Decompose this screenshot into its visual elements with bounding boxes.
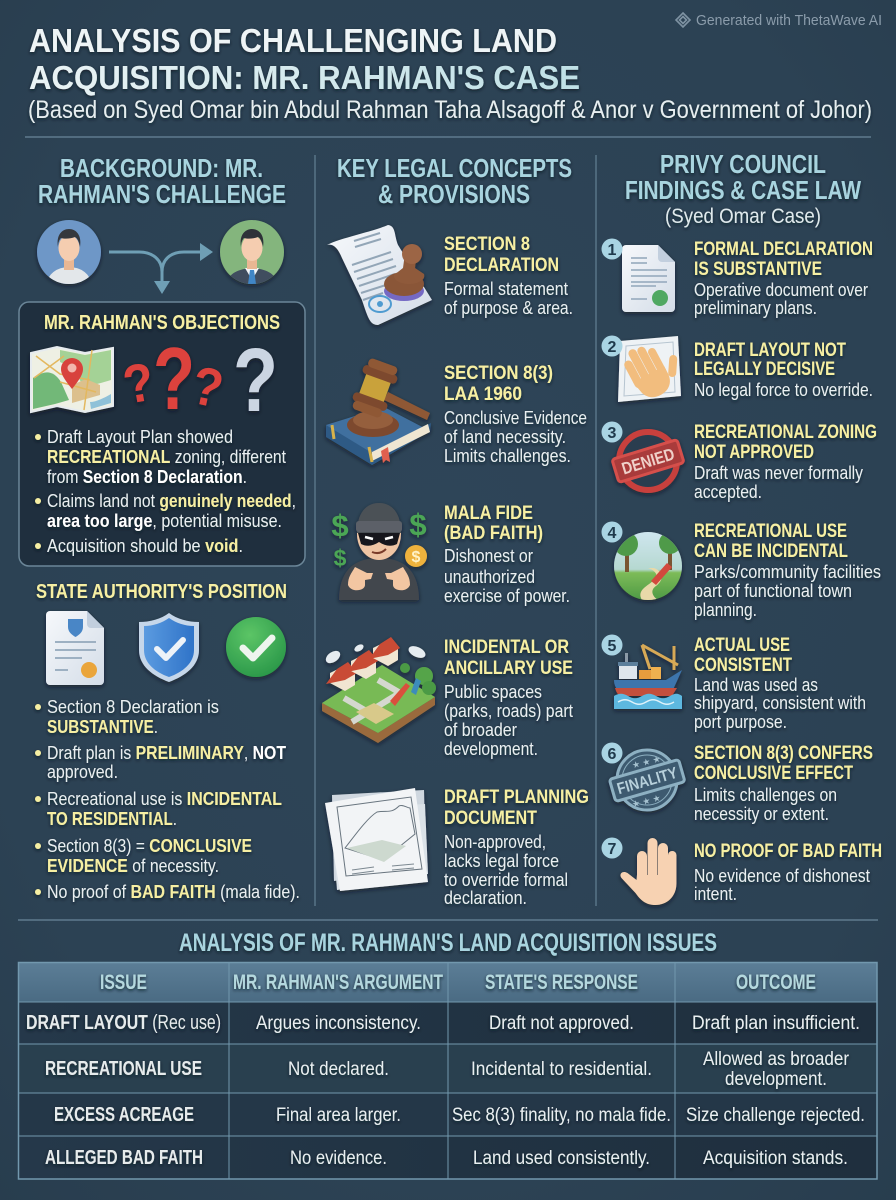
finding 4: [602, 521, 881, 620]
objections list: RECREATIONAL zoning, different: [47, 447, 286, 467]
icon: scroll and stamp: [327, 225, 432, 325]
icon: red question marks: ?: [187, 355, 228, 420]
table row: excess acreage: Size challenge rejected.: [686, 1105, 865, 1126]
table heading: ANALYSIS OF MR. RAHMAN'S LAND ACQUISITION ISSUES: [179, 929, 717, 957]
arrow: branching path: [109, 243, 213, 294]
table row: recreational use: Not declared.: [288, 1059, 389, 1080]
number badge 7: 7: [608, 841, 617, 858]
column 3 heading: [625, 149, 861, 228]
icon: masked thief with money: $: [412, 549, 421, 566]
table row: excess acreage: Final area larger.: [276, 1105, 401, 1126]
finding text: [694, 521, 881, 620]
watermark: Generated with ThetaWave AI: [696, 12, 882, 29]
concept text: Non-approved,: [444, 832, 546, 852]
table: land acquisition issues: [18, 962, 877, 1179]
icon: certified document: [46, 611, 104, 685]
icon: red question marks: ?: [119, 352, 159, 416]
finding text: [694, 239, 873, 318]
finding text: [694, 635, 866, 732]
table row: recreational use: Allowed as broader: [703, 1049, 850, 1070]
finding text: LEGALLY DECISIVE: [694, 359, 835, 380]
concept: Section 8 Declaration: [327, 225, 573, 325]
table row: excess acreage: EXCESS ACREAGE: [54, 1104, 194, 1126]
number badge 5: [602, 634, 622, 656]
table row: recreational use: Incidental to residential.: [471, 1059, 652, 1080]
concept text: lacks legal force: [444, 851, 559, 871]
finding text: CONCLUSIVE EFFECT: [694, 763, 853, 784]
column 3 heading: (Syed Omar Case): [665, 205, 821, 228]
concept: Draft Planning Document: [325, 787, 589, 908]
concept text: exercise of power.: [444, 586, 570, 606]
finding 3: [602, 422, 877, 502]
finding text: CAN BE INCIDENTAL: [694, 541, 848, 562]
finding 7: [602, 838, 882, 905]
finding text: intent.: [694, 884, 737, 904]
concept text: of broader: [444, 720, 517, 740]
icon: raised hand: [620, 838, 676, 905]
concept text: (BAD FAITH): [444, 523, 543, 544]
concept text: [444, 503, 570, 606]
concept text: [444, 787, 589, 908]
icon: hand on draft layout: [618, 332, 690, 404]
state position list: SUBSTANTIVE.: [47, 717, 158, 737]
section heading: STATE AUTHORITY'S POSITION: [36, 581, 287, 603]
number badge 4: [602, 522, 622, 542]
table row: alleged bad faith: Acquisition stands.: [703, 1148, 848, 1169]
title: [29, 22, 580, 96]
table row: alleged bad faith: [45, 1147, 848, 1169]
icon: state officer avatar: [220, 220, 284, 286]
concept text: INCIDENTAL OR: [444, 637, 569, 658]
concept text: Conclusive Evidence: [444, 408, 587, 428]
state position list: Recreational use is INCIDENTAL: [47, 789, 282, 809]
icon: denied stamp: DENIED: [620, 444, 677, 478]
column 3 heading: PRIVY COUNCIL: [660, 149, 826, 179]
state position list: Section 8(3) = CONCLUSIVE: [47, 836, 252, 856]
finding text: Operative document over: [694, 280, 868, 300]
state position list: TO RESIDENTIAL.: [47, 809, 177, 829]
table row: draft layout: [26, 1012, 860, 1034]
state position list: Section 8 Declaration is: [47, 697, 219, 717]
icon: Mr. Rahman avatar: [35, 220, 103, 288]
concept text: [444, 234, 573, 318]
finding text: IS SUBSTANTIVE: [694, 259, 822, 280]
icon: red question marks: [119, 329, 228, 428]
column 2 heading: KEY LEGAL CONCEPTS: [337, 153, 572, 183]
concept text: ANCILLARY USE: [444, 658, 573, 679]
finding text: [694, 841, 882, 904]
concept text: DECLARATION: [444, 255, 559, 276]
column 1 heading: BACKGROUND: MR.: [60, 153, 263, 183]
icon: masked thief with money: $: [334, 545, 347, 571]
icon: finality stamp: ★ ★ ★: [631, 793, 662, 809]
number badge 3: 3: [608, 425, 617, 442]
table row: draft layout: Argues inconsistency.: [256, 1013, 421, 1034]
table header row: ISSUE: [100, 971, 147, 994]
finding 5: [602, 634, 866, 732]
column 1 heading: [38, 153, 286, 209]
concept text: of land necessity.: [444, 427, 566, 447]
finding text: ACTUAL USE: [694, 635, 790, 656]
table row: alleged bad faith: Land used consistently.: [473, 1148, 650, 1169]
table row: excess acreage: Sec 8(3) finality, no mala fide.: [452, 1105, 671, 1126]
column 1 heading: RAHMAN'S CHALLENGE: [38, 179, 286, 209]
icon: grey question mark: ?: [233, 331, 278, 431]
finding text: shipyard, consistent with: [694, 693, 866, 713]
number badge 6: 6: [608, 746, 617, 763]
icon: masked thief with money: [331, 503, 427, 600]
finding text: accepted.: [694, 482, 762, 502]
finding text: preliminary plans.: [694, 298, 817, 318]
finding text: NOT APPROVED: [694, 442, 814, 463]
icon: masked thief with money: $: [409, 507, 427, 542]
icon: isometric neighbourhood: [322, 637, 436, 743]
concept text: of purpose & area.: [444, 298, 573, 318]
icon: park: [614, 532, 682, 600]
finding 6: [602, 742, 873, 824]
finding text: No legal force to override.: [694, 380, 873, 400]
icon: ship: [614, 645, 682, 709]
panel: Mr. Rahman's objections: [19, 302, 305, 566]
concept text: Dishonest or: [444, 546, 533, 566]
state position list: approved.: [47, 762, 118, 782]
concept text: (parks, roads) part: [444, 701, 573, 721]
table header row: STATE'S RESPONSE: [485, 971, 638, 994]
concept text: unauthorized: [444, 567, 535, 587]
concept text: LAA 1960: [444, 384, 522, 405]
concept: Incidental or Ancillary Use: [322, 637, 573, 759]
table row: recreational use: RECREATIONAL USE: [45, 1058, 202, 1080]
concept text: DRAFT PLANNING: [444, 787, 589, 808]
finding text: port purpose.: [694, 712, 787, 732]
objections list: Acquisition should be void.: [47, 536, 243, 556]
state position list: EVIDENCE of necessity.: [47, 856, 219, 876]
icon: stacked draft plans: [325, 788, 428, 891]
table row: alleged bad faith: ALLEGED BAD FAITH: [45, 1147, 203, 1169]
table header row: [100, 971, 816, 994]
concept text: Formal statement: [444, 279, 568, 299]
table row: recreational use: [45, 1049, 850, 1090]
finding text: [694, 743, 873, 824]
icon: formal document: [622, 245, 675, 312]
state position list: Draft plan is PRELIMINARY, NOT: [47, 743, 286, 763]
finding text: necessity or extent.: [694, 804, 829, 824]
icon: map with pin: [31, 347, 113, 412]
table row: draft layout: Draft plan insufficient.: [692, 1013, 860, 1034]
icon: finality stamp: FINALITY: [615, 765, 680, 798]
concept text: Public spaces: [444, 682, 542, 702]
icon: red question marks: ?: [153, 329, 195, 428]
number badge 7: [602, 838, 622, 858]
table header row: OUTCOME: [736, 971, 816, 994]
state position list: [35, 697, 300, 902]
table row: draft layout: Draft not approved.: [489, 1013, 634, 1034]
finding text: [694, 422, 877, 502]
icon: finality stamp: ★ ★ ★: [631, 754, 662, 770]
finding text: Limits challenges on: [694, 785, 837, 805]
objections list: Claims land not genuinely needed,: [47, 491, 296, 511]
concept text: [444, 363, 587, 466]
concept: Section 8(3) LAA 1960: [326, 356, 587, 466]
title: ANALYSIS OF CHALLENGING LAND: [29, 22, 557, 59]
finding 1: [602, 238, 873, 318]
concept text: SECTION 8: [444, 234, 530, 255]
concept text: DOCUMENT: [444, 808, 537, 829]
panel: state authority's position: [35, 581, 300, 902]
concept: Mala Fide: [331, 503, 570, 606]
table header row: MR. RAHMAN'S ARGUMENT: [233, 971, 443, 994]
finding text: RECREATIONAL USE: [694, 521, 847, 542]
title: ACQUISITION: MR. RAHMAN'S CASE: [29, 59, 580, 96]
number badge 3: [602, 422, 622, 442]
finding text: [694, 340, 873, 400]
state position list: No proof of BAD FAITH (mala fide).: [47, 882, 300, 902]
number badge 2: 2: [608, 339, 617, 356]
objections list: [35, 427, 296, 556]
number badge 6: [602, 742, 622, 764]
objections list: from Section 8 Declaration.: [47, 467, 247, 487]
table row: excess acreage: [54, 1104, 865, 1126]
icon: finality stamp: [609, 750, 685, 810]
icon: shield with check: [139, 613, 199, 682]
concept text: declaration.: [444, 888, 527, 908]
objections list: Draft Layout Plan showed: [47, 427, 233, 447]
column 2 heading: & PROVISIONS: [378, 179, 530, 209]
finding text: Parks/community facilities: [694, 562, 881, 582]
concept text: [444, 637, 573, 759]
table row: draft layout: DRAFT LAYOUT (Rec use): [26, 1012, 221, 1034]
number badge 1: [602, 238, 622, 260]
icon: gavel on book: [326, 356, 431, 465]
table row: recreational use: development.: [725, 1069, 827, 1090]
column 2 heading: [337, 153, 572, 209]
panel heading: MR. RAHMAN'S OBJECTIONS: [44, 312, 280, 334]
concept text: to override formal: [444, 870, 568, 890]
number badge 5: 5: [608, 638, 617, 655]
objections list: area too large, potential misuse.: [47, 511, 282, 531]
icon: masked thief with money: $: [331, 508, 349, 543]
finding 2: [602, 332, 873, 404]
finding text: No evidence of dishonest: [694, 866, 870, 886]
number badge 2: [602, 336, 622, 356]
finding text: part of functional town: [694, 581, 852, 601]
finding text: DRAFT LAYOUT NOT: [694, 340, 846, 361]
concept text: Limits challenges.: [444, 446, 571, 466]
concept text: SECTION 8(3): [444, 363, 553, 384]
number badge 4: 4: [608, 525, 617, 542]
concept text: MALA FIDE: [444, 503, 533, 524]
concept text: development.: [444, 739, 538, 759]
icon: denied stamp: [612, 432, 684, 490]
number badge 1: 1: [608, 242, 617, 259]
finding text: Land was used as: [694, 675, 818, 695]
icon: green check circle: [226, 617, 286, 677]
finding text: planning.: [694, 600, 757, 620]
table row: alleged bad faith: No evidence.: [290, 1148, 387, 1169]
finding text: Draft was never formally: [694, 463, 863, 483]
finding text: CONSISTENT: [694, 655, 792, 676]
